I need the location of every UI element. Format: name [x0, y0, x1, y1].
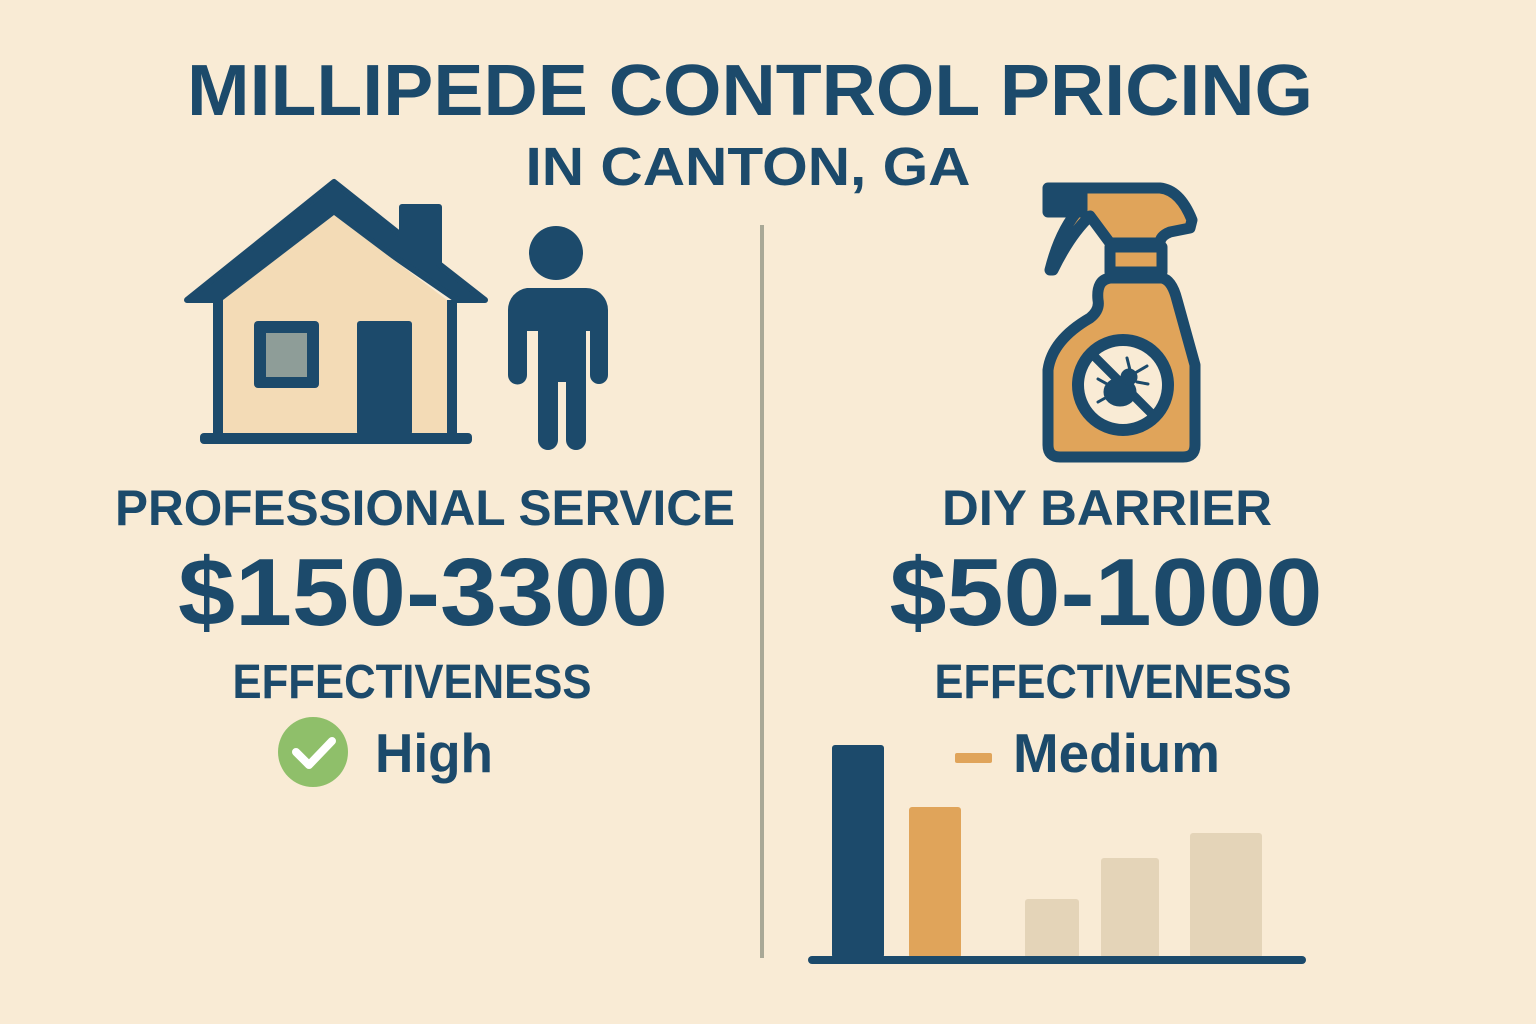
divider [760, 225, 764, 958]
icon: house [187, 182, 485, 444]
bar chart [808, 745, 1306, 964]
title: MILLIPEDE CONTROL PRICING [187, 51, 1313, 131]
icon: spray bottle [1048, 188, 1195, 457]
label: effectiveness right: EFFECTIVENESS [934, 656, 1292, 709]
price: diy: $50-1000 [890, 539, 1322, 646]
heading: diy barrier: DIY BARRIER [942, 480, 1272, 536]
label: effectiveness left: EFFECTIVENESS [232, 656, 592, 709]
title [187, 51, 1313, 197]
price: professional: $150-3300 [178, 539, 668, 646]
icon: check [278, 717, 348, 787]
icon: person [508, 226, 608, 450]
icon: bug [1098, 358, 1148, 405]
title: IN CANTON, GA [526, 137, 970, 197]
rating: medium: Medium [1013, 722, 1220, 784]
heading: professional service: PROFESSIONAL SERVICE [115, 480, 735, 536]
rating: high: High [375, 722, 493, 784]
